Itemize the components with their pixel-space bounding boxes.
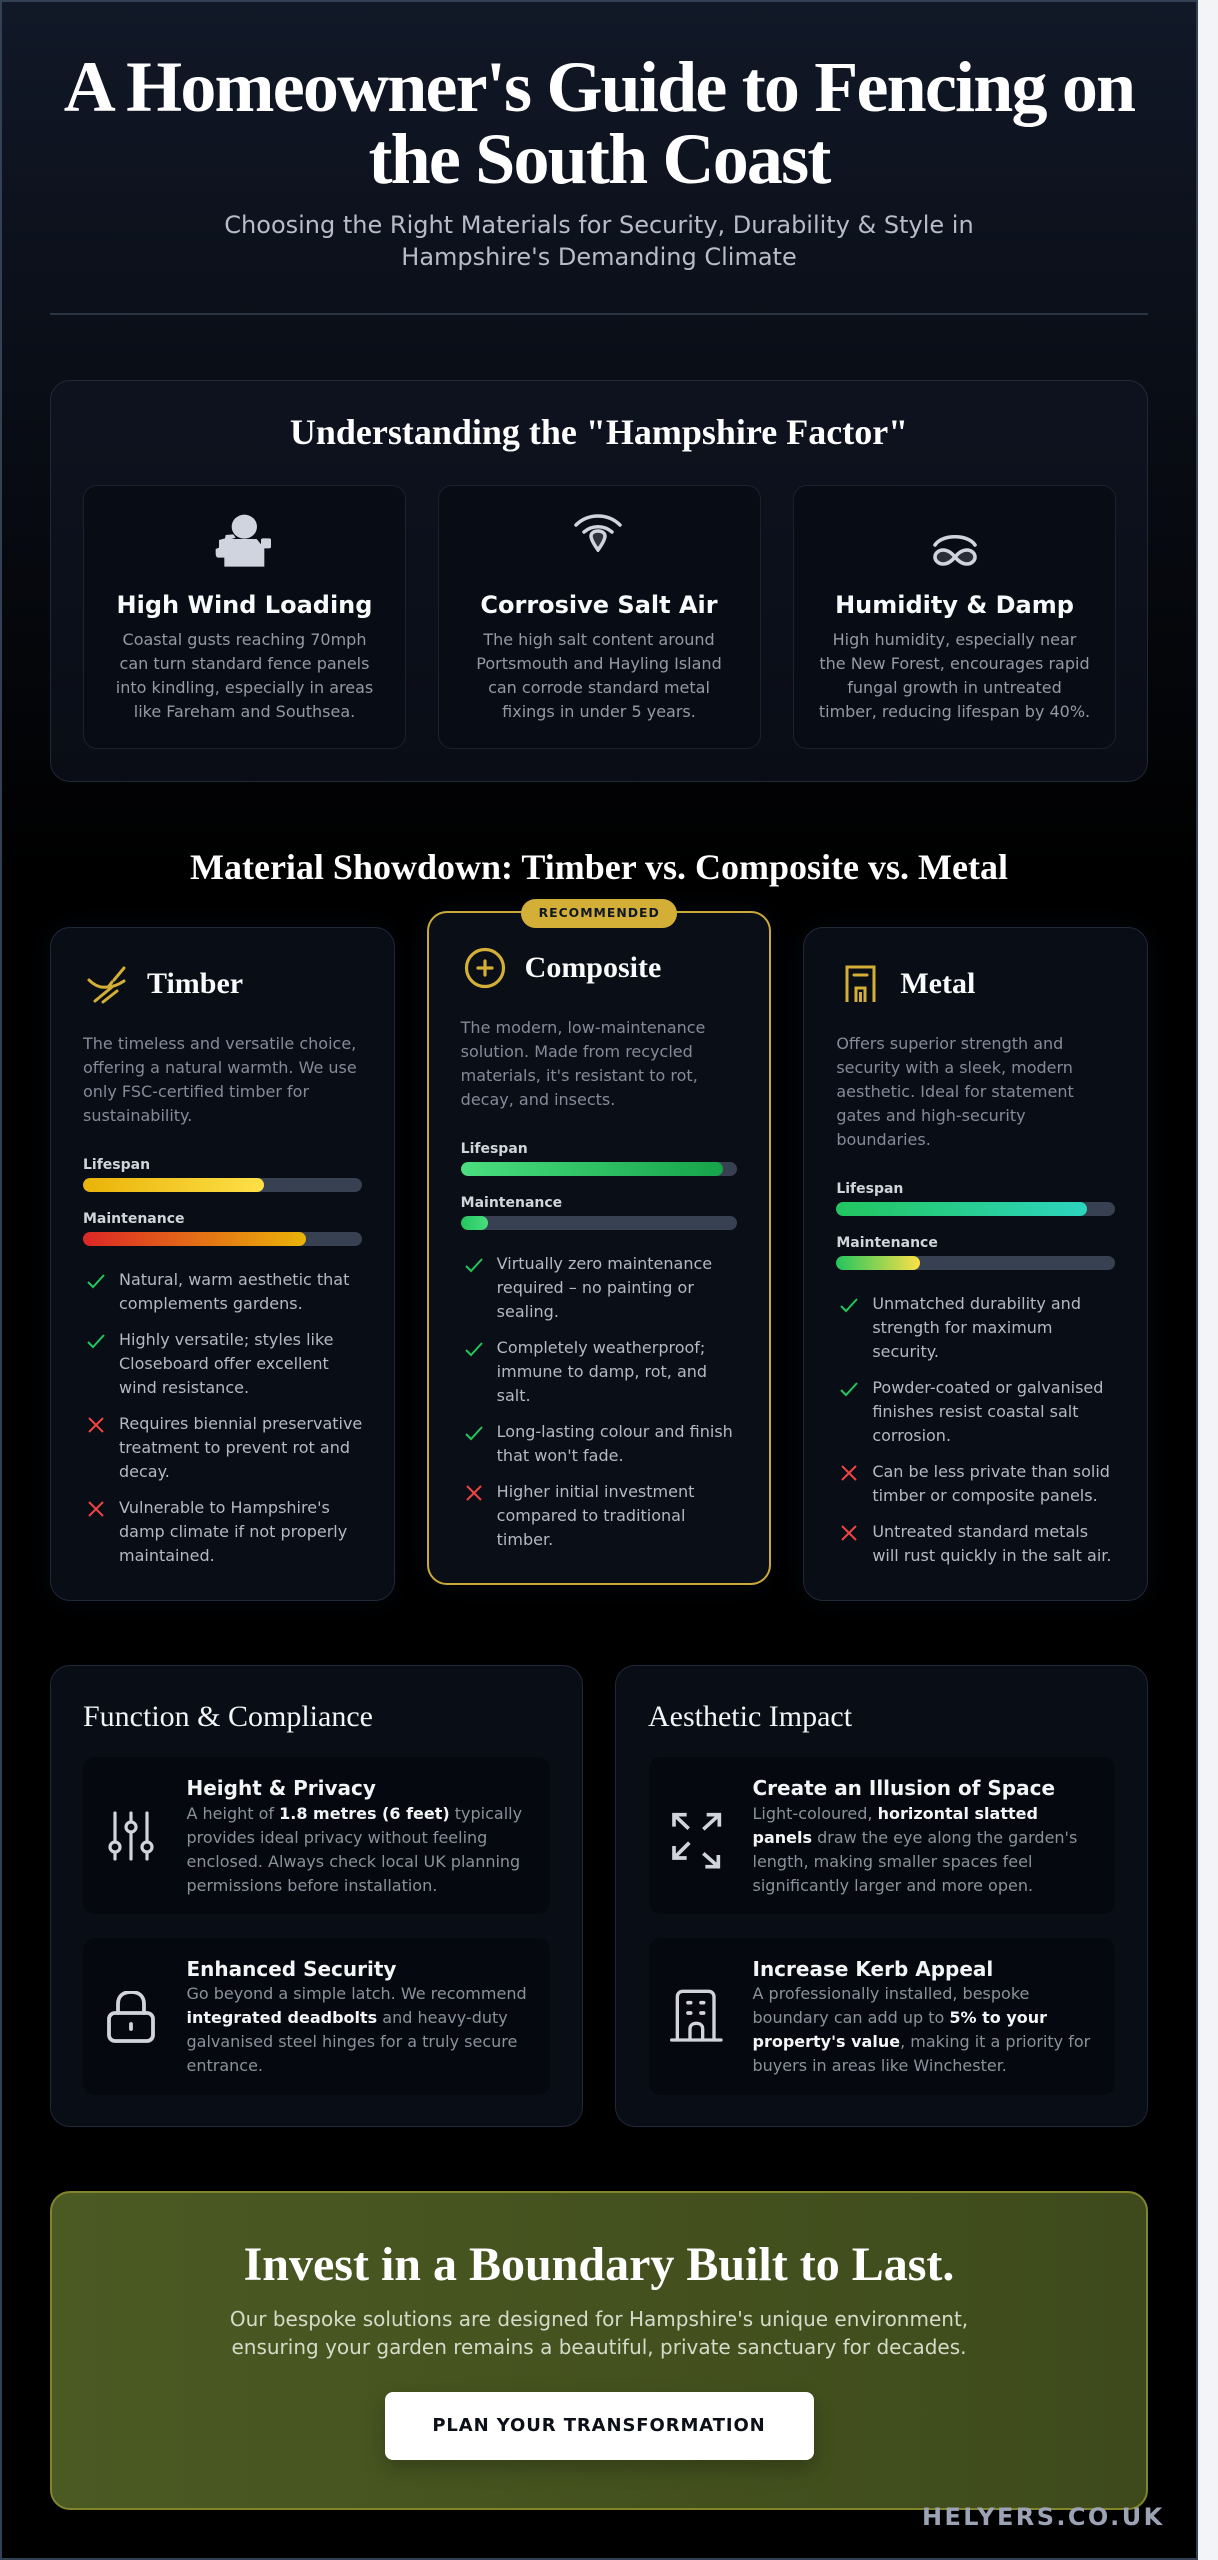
badge: Recommended: RECOMMENDED bbox=[539, 905, 660, 920]
badge: Recommended bbox=[521, 899, 677, 928]
list: Timber pros and cons: Requires biennial preservative bbox=[119, 1414, 362, 1433]
header: Composite: Composite bbox=[525, 951, 661, 984]
header: Composite bbox=[464, 948, 661, 988]
list: Metal pros and cons: will rust quickly in the salt air. bbox=[872, 1546, 1111, 1565]
list: Composite pros and cons: Higher initial investment bbox=[497, 1482, 694, 1501]
heading: Hampshire factor: Understanding the "Hampshire Factor" bbox=[290, 412, 908, 452]
panel: Timber: The timeless and versatile choice, bbox=[83, 1034, 356, 1053]
list: Composite pros and cons: required – no painting or bbox=[497, 1278, 694, 1297]
list: Timber pros and cons: maintained. bbox=[119, 1546, 215, 1565]
metric: Maintenance bbox=[836, 1235, 1115, 1270]
card: Enhanced Security: entrance. bbox=[186, 2056, 263, 2075]
panel: Timber: only FSC-certified timber for bbox=[83, 1082, 309, 1101]
metric: Lifespan: Lifespan bbox=[836, 1181, 903, 1197]
metric: Maintenance bbox=[83, 1211, 362, 1246]
list: Timber pros and cons: decay. bbox=[119, 1462, 170, 1481]
panel: Function and Compliance bbox=[50, 1665, 583, 2127]
button: plan your transformation bbox=[384, 2392, 814, 2460]
card: Humidity and Damp: timber, reducing lifespan by 40%. bbox=[819, 702, 1090, 721]
header: Timber: Timber bbox=[147, 967, 243, 1000]
list: Timber pros and cons: wind resistance. bbox=[119, 1378, 249, 1397]
list: Timber pros and cons: Closeboard offer excellent bbox=[119, 1354, 329, 1373]
icon: composite bbox=[464, 948, 506, 988]
card: Illusion of Space: Create an Illusion of Space bbox=[752, 1776, 1055, 1800]
subtitle: Choosing the Right Materials for Security, Durability & Style in bbox=[224, 211, 974, 239]
list: Composite pros and cons: Virtually zero maintenance bbox=[497, 1254, 712, 1273]
panel: Composite (recommended): The modern, low-maintenance bbox=[461, 1018, 705, 1037]
card: Enhanced Security: galvanised steel hinges for a truly secure bbox=[186, 2032, 517, 2051]
icon: sliders bbox=[108, 1811, 154, 1861]
panel: Metal: security with a sleek, modern bbox=[836, 1058, 1073, 1077]
list: Metal pros and cons: Unmatched durability and bbox=[872, 1294, 1081, 1313]
panel: Timber: sustainability. bbox=[83, 1106, 192, 1125]
list: Metal pros and cons: Untreated standard metals bbox=[872, 1522, 1088, 1541]
heading: Material Showdown: Material Showdown: Timber vs. Composite vs. Metal bbox=[190, 847, 1008, 887]
card: Enhanced Security: Go beyond a simple latch. We recommend bbox=[186, 1984, 527, 2003]
metric: Lifespan bbox=[83, 1157, 362, 1192]
card: High Wind Loading: Coastal gusts reaching 70mph bbox=[123, 630, 366, 649]
list: Metal pros and cons: Powder-coated or galvanised bbox=[872, 1378, 1103, 1397]
metric: Maintenance bbox=[461, 1195, 737, 1230]
list: Timber pros and cons: treatment to prevent rot and bbox=[119, 1438, 350, 1457]
list: Timber pros and cons: complements gardens. bbox=[119, 1294, 303, 1313]
icon: padlock bbox=[107, 1991, 155, 2043]
list: Metal pros and cons: security. bbox=[872, 1342, 939, 1361]
metric: Maintenance: Maintenance bbox=[836, 1235, 938, 1251]
list: Timber pros and cons bbox=[87, 1270, 362, 1565]
list: Metal pros and cons: finishes resist coastal salt bbox=[872, 1402, 1078, 1421]
icon: building bbox=[670, 1990, 723, 2042]
text: call to action: Our bespoke solutions are designed for Hampshire's unique environment, bbox=[230, 2307, 968, 2331]
subtitle bbox=[224, 211, 974, 271]
list: Metal pros and cons: Can be less private than solid bbox=[872, 1462, 1110, 1481]
icon: wind silhouette bbox=[216, 514, 271, 567]
metric: Lifespan bbox=[461, 1141, 737, 1176]
heading: call to action: Invest in a Boundary Built to Last. bbox=[244, 2238, 954, 2290]
list: Composite pros and cons: sealing. bbox=[497, 1302, 559, 1321]
list: Timber pros and cons: damp climate if not properly bbox=[119, 1522, 347, 1541]
card: High Wind Loading bbox=[83, 485, 406, 749]
panel: Composite (recommended): materials, it's resistant to rot, bbox=[461, 1066, 698, 1085]
title: the South Coast bbox=[368, 119, 830, 199]
card: Illusion of Space: Light-coloured, horizontal slatted bbox=[752, 1804, 1038, 1822]
list: Composite pros and cons: salt. bbox=[497, 1386, 531, 1405]
subtitle: Hampshire's Demanding Climate bbox=[401, 243, 797, 271]
card: Height and Privacy: permissions before installation. bbox=[186, 1876, 437, 1894]
card: Humidity and Damp: fungal growth in untreated bbox=[847, 678, 1062, 697]
card: Corrosive Salt Air bbox=[438, 485, 760, 749]
panel: Metal: gates and high-security bbox=[836, 1106, 1026, 1125]
header: Metal: Metal bbox=[900, 967, 975, 1000]
panel: Timber: offering a natural warmth. We use bbox=[83, 1058, 357, 1077]
card: Kerb Appeal: Increase Kerb Appeal bbox=[752, 1957, 993, 1981]
header: Metal bbox=[846, 966, 975, 1002]
card: Corrosive Salt Air: The high salt content around bbox=[483, 630, 715, 649]
card: Kerb Appeal: property's value, making it a priority for bbox=[752, 2032, 1090, 2051]
text: call to action: ensuring your garden remains a beautiful, private sanctuary for decades. bbox=[231, 2335, 967, 2359]
list: Timber pros and cons: Vulnerable to Hampshire's bbox=[119, 1498, 330, 1517]
list: Metal pros and cons bbox=[840, 1294, 1111, 1565]
panel: Hampshire factor bbox=[50, 380, 1148, 782]
title: A Homeowner's Guide to Fencing on bbox=[64, 47, 1134, 127]
panel: Timber bbox=[50, 927, 395, 1601]
icon: expand arrows bbox=[672, 1812, 722, 1868]
icon: metal gate bbox=[846, 966, 876, 1002]
panel: Composite (recommended): solution. Made from recycled bbox=[461, 1042, 693, 1061]
card: High Wind Loading: can turn standard fence panels bbox=[120, 654, 369, 673]
card: Illusion of Space: panels draw the eye along the garden's bbox=[752, 1828, 1077, 1846]
card: High Wind Loading: like Fareham and Southsea. bbox=[134, 702, 355, 721]
card: Corrosive Salt Air: fixings in under 5 years. bbox=[502, 702, 696, 721]
metric: Lifespan: Lifespan bbox=[461, 1141, 528, 1157]
card: Humidity and Damp: High humidity, especially near bbox=[833, 630, 1076, 649]
card: Enhanced Security: Enhanced Security bbox=[186, 1957, 396, 1981]
card: Corrosive Salt Air: Corrosive Salt Air bbox=[480, 591, 718, 619]
list: Metal pros and cons: strength for maximum bbox=[872, 1318, 1053, 1337]
panel: Composite (recommended): decay, and insects. bbox=[461, 1090, 615, 1109]
card: Kerb Appeal bbox=[649, 1938, 1115, 2095]
header: Timber bbox=[87, 966, 243, 1004]
list: Composite pros and cons: that won't fade. bbox=[497, 1446, 624, 1465]
panel: Metal: Offers superior strength and bbox=[836, 1034, 1063, 1053]
icon: humidity arc and infinity bbox=[933, 535, 977, 566]
panel: Metal: boundaries. bbox=[836, 1130, 931, 1149]
metric: Maintenance: Maintenance bbox=[83, 1211, 185, 1227]
metric: Lifespan: Lifespan bbox=[83, 1157, 150, 1173]
metric: Maintenance: Maintenance bbox=[461, 1195, 562, 1211]
card: Height and Privacy: enclosed. Always check local UK planning bbox=[186, 1852, 520, 1870]
panel: Aesthetic Impact bbox=[615, 1665, 1148, 2127]
panel: Composite (recommended) bbox=[427, 911, 771, 1585]
list: Metal pros and cons: corrosion. bbox=[872, 1426, 951, 1445]
list: Composite pros and cons: Long-lasting colour and finish bbox=[497, 1422, 733, 1441]
heading: Function and Compliance: Function & Compliance bbox=[83, 1700, 373, 1733]
card: High Wind Loading: into kindling, especially in areas bbox=[116, 678, 373, 697]
card: Humidity and Damp: Humidity & Damp bbox=[835, 591, 1074, 619]
list: Timber pros and cons: Natural, warm aesthetic that bbox=[119, 1270, 349, 1289]
card: Illusion of Space: significantly larger and more open. bbox=[752, 1876, 1033, 1894]
panel: call to action bbox=[50, 2190, 1148, 2510]
card: Height and Privacy: A height of 1.8 metres (6 feet) typically bbox=[186, 1804, 522, 1822]
card: Humidity and Damp: the New Forest, encourages rapid bbox=[819, 654, 1090, 673]
list: Composite pros and cons: immune to damp, rot, and bbox=[497, 1362, 707, 1381]
watermark: HELYERS.CO.UK bbox=[922, 2503, 1165, 2531]
list: Composite pros and cons: Completely weatherproof; bbox=[497, 1338, 705, 1357]
list: Metal pros and cons: timber or composite panels. bbox=[872, 1486, 1098, 1505]
card: Humidity and Damp bbox=[793, 485, 1116, 749]
card: Kerb Appeal: boundary can add up to 5% to your bbox=[752, 2008, 1047, 2027]
card: Height and Privacy bbox=[83, 1757, 550, 1914]
list: Timber pros and cons: Highly versatile; styles like bbox=[119, 1330, 334, 1349]
card: Corrosive Salt Air: can corrode standard metal bbox=[488, 678, 710, 697]
list: Composite pros and cons: timber. bbox=[497, 1530, 553, 1549]
title bbox=[64, 47, 1135, 199]
button: plan your transformation: PLAN YOUR TRANSFORMATION bbox=[432, 2415, 766, 2436]
metric: Lifespan bbox=[836, 1181, 1115, 1216]
card: Enhanced Security: integrated deadbolts and heavy-duty bbox=[186, 2008, 508, 2027]
list: Composite pros and cons bbox=[465, 1254, 733, 1549]
icon: timber bbox=[87, 966, 126, 1004]
heading: Aesthetic Impact: Aesthetic Impact bbox=[648, 1700, 852, 1733]
card: Kerb Appeal: A professionally installed, bespoke bbox=[752, 1984, 1029, 2003]
card: Illusion of Space: length, making smaller spaces feel bbox=[752, 1852, 1032, 1870]
card: Illusion of Space bbox=[649, 1757, 1115, 1914]
text: call to action bbox=[230, 2307, 968, 2359]
card: Corrosive Salt Air: Portsmouth and Hayling Island bbox=[476, 654, 722, 673]
icon: salt air signal and drop bbox=[574, 514, 622, 552]
card: Enhanced Security bbox=[83, 1938, 550, 2095]
panel: Metal: aesthetic. Ideal for statement bbox=[836, 1082, 1074, 1101]
card: Height and Privacy: provides ideal privacy without feeling bbox=[186, 1828, 487, 1846]
card: Height and Privacy: Height & Privacy bbox=[186, 1776, 376, 1800]
card: High Wind Loading: High Wind Loading bbox=[117, 591, 372, 619]
panel: Metal bbox=[803, 927, 1148, 1601]
card: Kerb Appeal: buyers in areas like Winchester. bbox=[752, 2056, 1007, 2075]
list: Composite pros and cons: compared to traditional bbox=[497, 1506, 685, 1525]
